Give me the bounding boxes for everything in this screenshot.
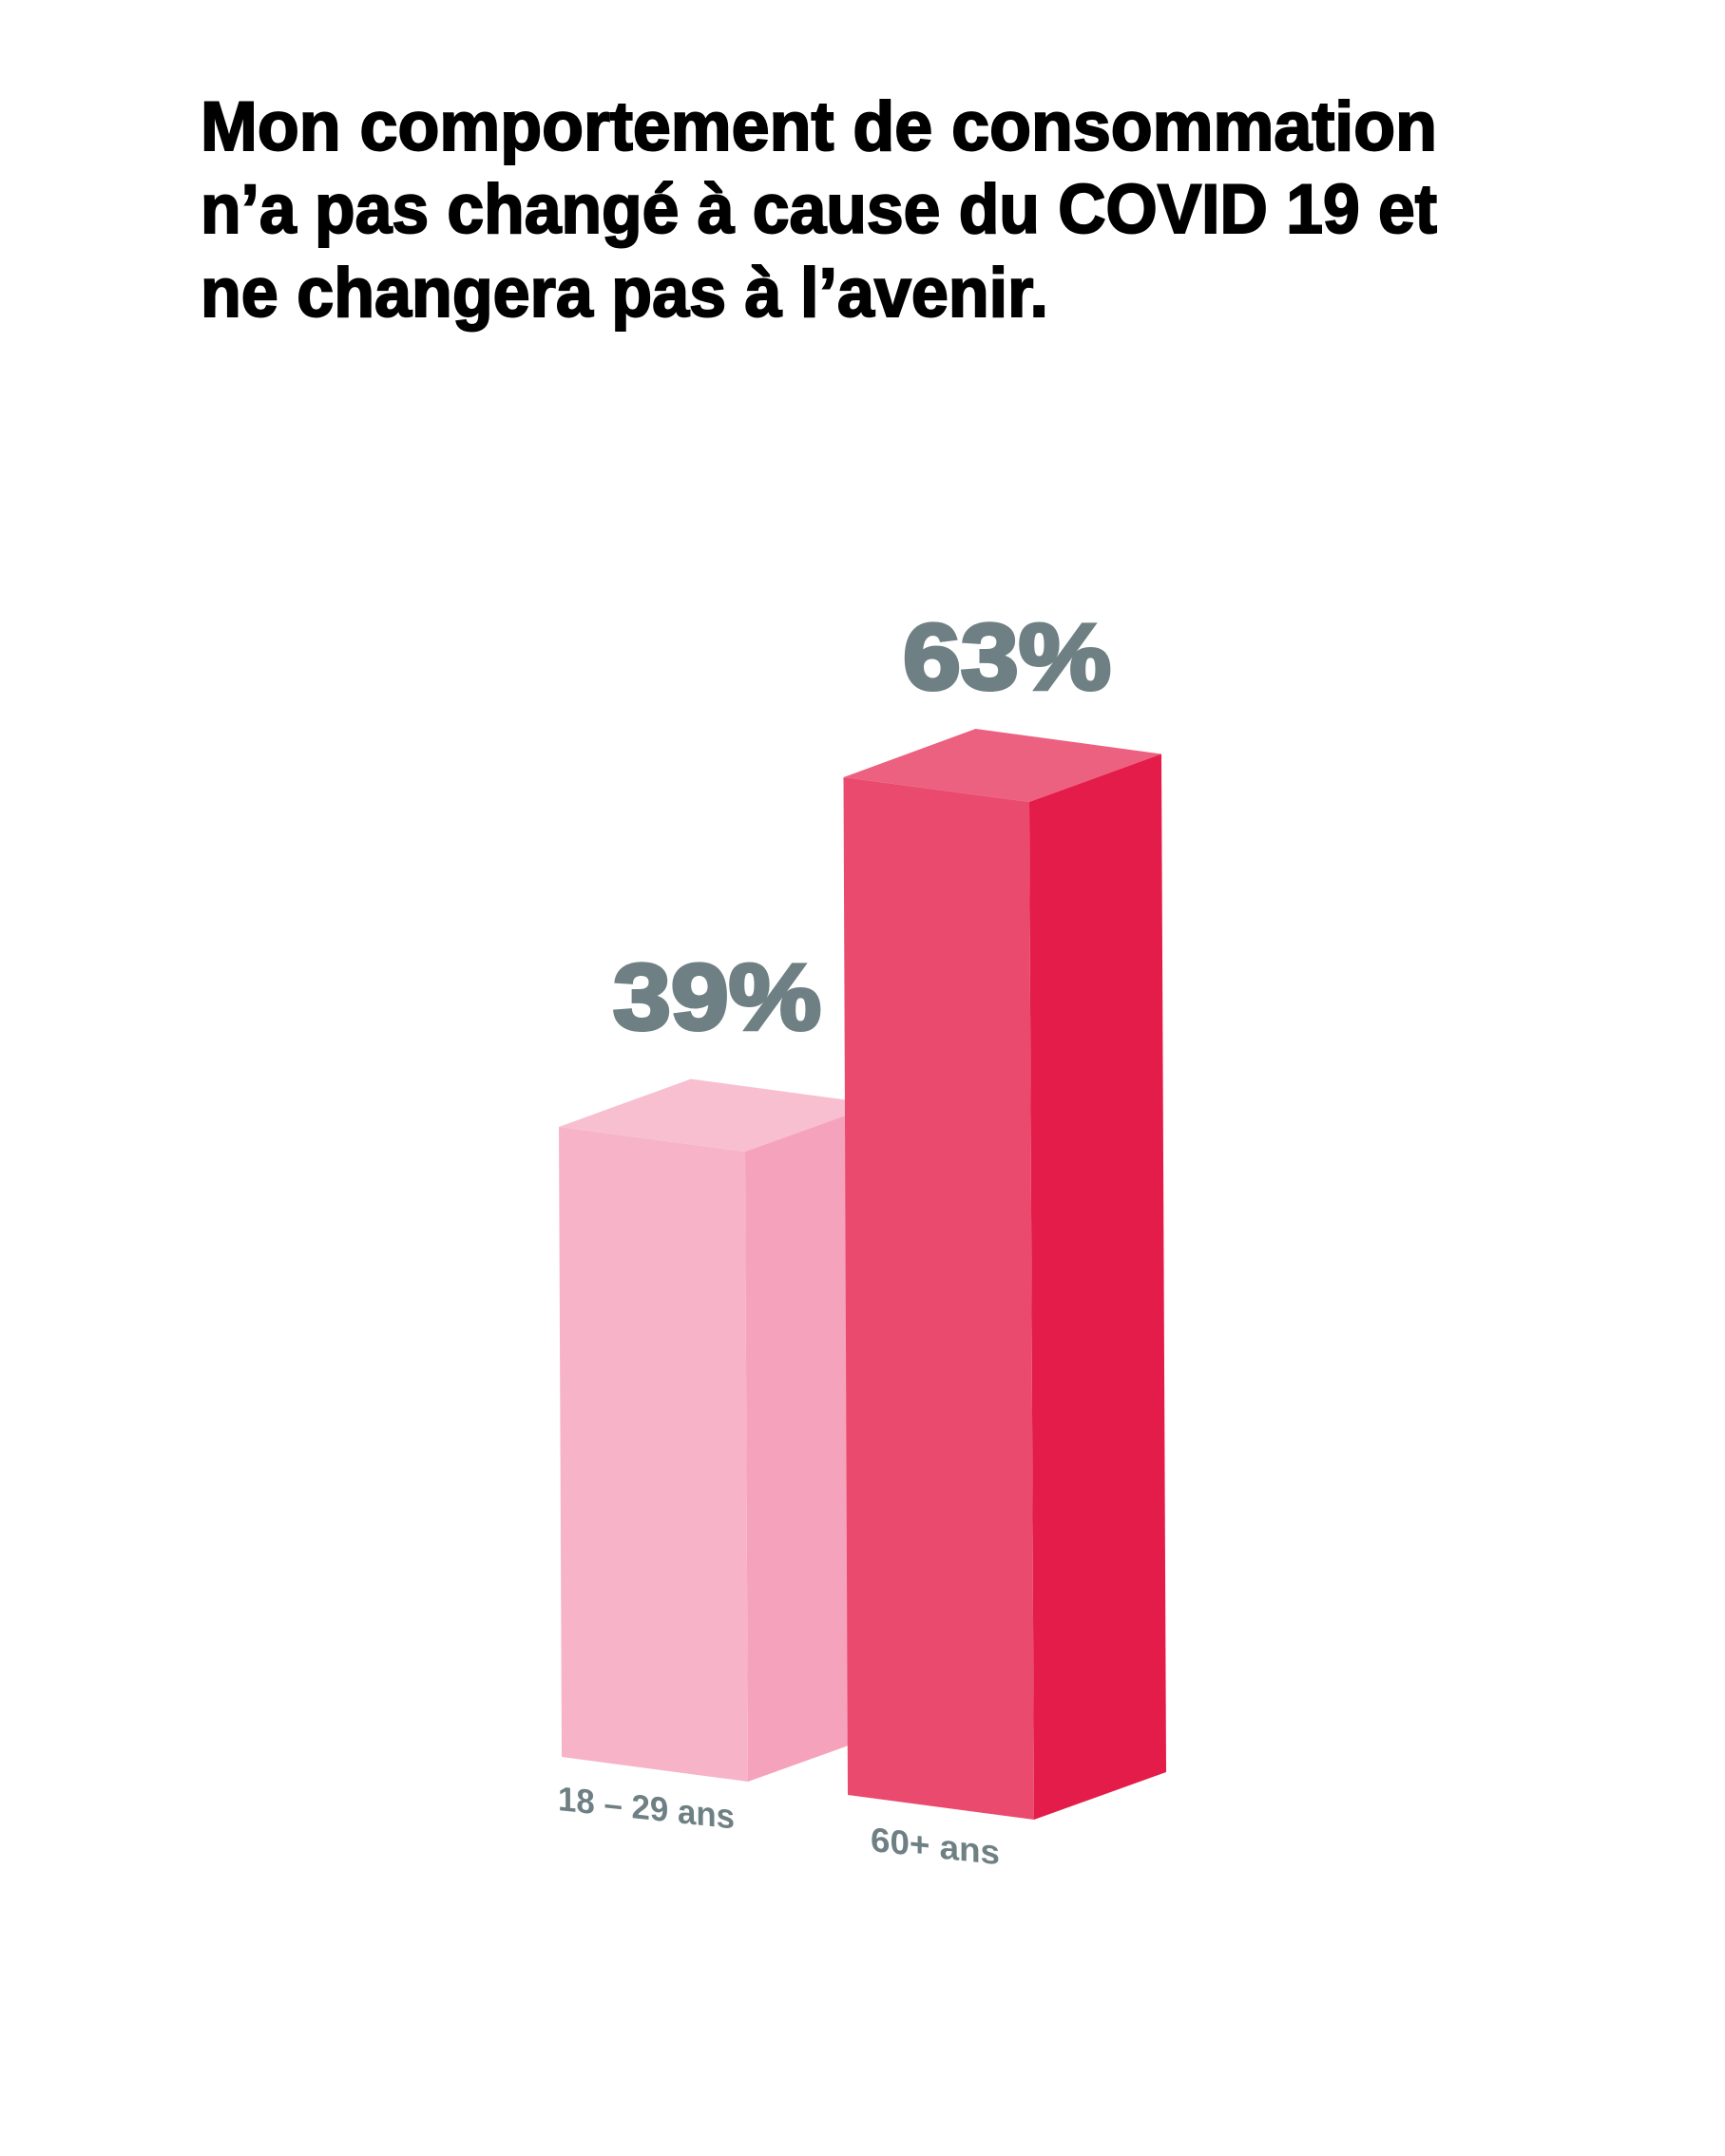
bar: 18 – 29 ans, 39% <box>559 1079 880 1782</box>
bar: 60+ ans, 63% <box>844 729 1166 1820</box>
title: ne changera pas à l’avenir. <box>201 255 1048 332</box>
title: Mon comportement de consommation <box>201 88 1437 165</box>
label: 18 – 29 ans: 18 – 29 ans <box>558 1779 735 1837</box>
label: 60+ ans: 60+ ans <box>871 1820 1000 1872</box>
value: 63%: 63% <box>903 604 1111 709</box>
title: n’a pas changé à cause du COVID 19 et <box>201 171 1437 248</box>
title <box>201 88 1437 332</box>
value: 39%: 39% <box>613 944 821 1049</box>
